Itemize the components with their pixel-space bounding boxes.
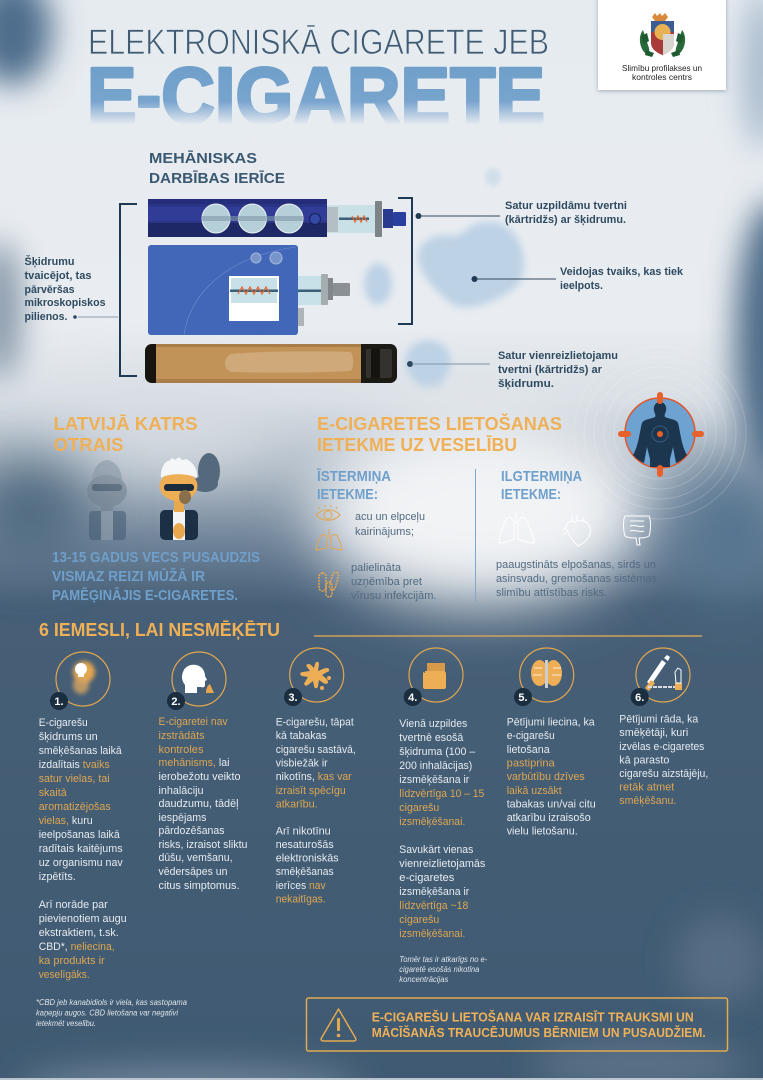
reason 5 [507,648,596,838]
callout: warning [306,998,728,1051]
text: teenagers statistic [52,549,260,604]
reason 4 [399,648,488,984]
reason 5: varbūtību dzīves [507,771,585,783]
panel: short-term impact: acu un elpceļu [355,511,425,523]
panel: short-term impact: uzņēmība pret [351,576,422,588]
reason 2: iespējams [158,812,207,824]
reason 4: izsmēķēšana ir [399,886,470,898]
reason 4: vienreizlietojamās [399,858,486,870]
panel: short-term impact: IETEKME: [317,486,378,503]
callout: warning: E-CIGAREŠU LIETOŠANA VAR IZRAISĪT TRAUKSMI UN [372,1010,694,1024]
heading: mechanical devices: MEHĀNISKAS [149,150,257,167]
device 3: disposable [145,344,397,383]
panel: long-term impact [496,468,657,599]
icon: splash: 3. [288,692,298,704]
reason 2: E-cigaretei nav [158,716,228,728]
icon: intestine [624,516,650,545]
callout: vapour [472,266,684,292]
callout: liquid vaporising: mikroskopiskos [24,297,106,309]
bracket: left [120,204,137,376]
reason 2: mehānisms, lai [158,757,230,769]
reason 3: ierīces nav [276,880,326,892]
reason 2: inhalāciju [158,785,204,797]
reason 4: tvertnē esošā [399,732,464,744]
callout: disposable tank: tvertni (kārtridžs) ar [498,364,603,376]
reason 2: citus simptomus. [158,880,240,892]
reason 5: tabakas un/vai citu [507,798,596,810]
reason 6: retāk atmet [619,782,674,794]
reason 1: CBD*, neliecina, [39,941,115,953]
reason 4: Tomēr tas ir atkarīgs no e- [399,955,488,964]
heading: 6 reasons: 6 IEMESLI, LAI NESMĒĶĒTU [39,620,280,640]
reason 6: smēķēšanu. [619,795,676,807]
reason 5: e-cigarešu [507,730,555,742]
reason 5: Pētījumi liecina, ka [507,716,596,728]
reason 4: cigarešu [399,914,439,926]
reason 5: pastiprina [507,758,556,770]
icon: viruses [319,572,339,597]
reason 1: E-cigarešu [39,717,88,729]
reason 4: Vienā uzpildes [399,718,468,730]
title: E-CIGARETE [87,50,545,140]
panel: long-term impact: paaugstināts elpošanas, sirds un [496,559,656,571]
icon: e-cigarette chained: 6. [635,692,644,704]
callout: refillable tank: Satur uzpildāmu tvertni [505,200,627,212]
reason 1: smēķēšanas laikā [39,745,123,757]
callout: refillable tank: (kārtridžs) ar šķidrumu. [505,214,626,226]
reason 3: kā tabakas [276,730,327,742]
icon: white lungs [499,512,534,543]
panel: long-term impact: asinsvadu, gremošanas sistēmas [496,573,657,585]
reason 1: uz organismu nav [39,857,123,869]
reason 3: nekaitīgas. [276,894,326,906]
reason 2: izstrādāts [158,730,205,742]
heading: every second in Latvia: OTRAIS [54,435,124,455]
reason 4: šķidruma (100 – [399,746,476,758]
text: teenagers statistic: 13-15 GADUS VECS PUSAUDZIS [52,549,260,566]
icon: smoking teenager [160,453,220,540]
heading: health impact [317,413,562,455]
heading: every second in Latvia [54,414,198,455]
reason 3: nesaturošās [276,839,334,851]
reason 4: e-cigaretes [399,872,455,884]
logo panel: kontroles centrs [632,72,692,82]
vapour clouds [364,168,524,388]
reason 2: ierobežotu veikto [158,771,240,783]
panel: short-term impact: kairinājums; [355,526,414,538]
reason 1: radītais kaitējums [39,843,123,855]
icon: e-cigarette chained [631,648,690,706]
title: ELEKTRONISKĀ CIGARETE JEB [88,23,549,62]
reason 5: vielu lietošanu. [507,826,578,838]
reason 2: kontroles [158,744,204,756]
reason 5: atkarību izraisošo [507,812,591,824]
footnote: CBD [36,998,188,1028]
panel: short-term impact: ĪSTERMIŅA [316,468,391,485]
icon: grey teenager [87,460,127,540]
icon: warning triangle [321,1009,356,1041]
reason 2: dūšu, vemšanu, [158,852,232,864]
icon: cigarette pack [404,648,463,706]
callout: liquid vaporising: pilienos. [24,311,68,323]
icon: brain: 5. [518,692,528,704]
reason 2: pārdozēšanas [158,825,225,837]
callout: refillable tank [416,200,627,226]
icon: cigarette pack: 4. [408,692,417,704]
callout: vapour: Veidojas tvaiks, kas tiek [560,266,684,278]
footnote: CBD: kaņepju augos. CBD lietošana var negatīvi [36,1008,178,1018]
heading: every second in Latvia: LATVIJĀ KATRS [54,414,198,434]
reason 4: cigaretē esošās nikotīna [399,965,480,974]
reason 3 [276,648,356,906]
reason 6: kā parasto [619,754,669,766]
callout: vapour: ieelpots. [560,280,603,292]
reason 6: Pētījumi rāda, ka [619,714,699,726]
footnote: CBD: ietekmēt veselību. [36,1019,96,1028]
reason 4: līdzvērtīga ~18 [399,900,468,912]
reason 3: nikotīns, kas var [276,771,352,783]
heading: mechanical devices: DARBĪBAS IERĪCE [149,170,285,187]
reason 4: izsmēķēšanai. [399,928,465,940]
icon: brain [514,648,574,706]
callout: disposable tank: Satur vienreizlietojamu [498,350,618,362]
callout: liquid vaporising: Šķidrumu [24,255,74,268]
heading: health impact: IETEKME UZ VESELĪBU [317,435,517,455]
reason 5: laikā uzsākt [507,785,562,797]
reason 1: izpētīts. [39,871,76,883]
callout: liquid vaporising: tvaicējot, tas [24,270,92,282]
callout: disposable tank [407,350,618,390]
reason 3: Arī nikotīnu [276,826,331,838]
icon: heart [563,515,590,546]
heading: health impact: E-CIGARETES LIETOŠANAS [317,413,562,434]
reason 1: vielas, kuru [39,815,93,827]
reason 1: šķidrums un [39,731,98,743]
icon: orange lungs [316,529,342,550]
icon: coat of arms [640,13,685,57]
reason 6 [619,648,708,807]
reason 1: ieelpošanas laikā [39,829,121,841]
device 2: box mod [148,245,350,335]
reason 4: līdzvērtīga 10 – 15 [399,788,484,800]
callout: warning: MĀCĪŠANĀS TRAUCĒJUMUS BĒRNIEM UN PUSAUDŽIEM. [372,1025,706,1040]
text: teenagers statistic: PAMĒĢINĀJIS E-CIGARETES. [52,587,238,604]
logo panel [598,0,726,90]
reason 1 [39,652,127,981]
reason 3: elektroniskās [276,852,339,864]
device 1: refillable pen [148,199,406,237]
icon: skull smoke: 1. [54,696,64,708]
icon: splash [284,648,344,706]
icon: head exhaling: 2. [171,696,181,708]
callout: liquid vaporising [24,255,118,323]
panel: short-term impact [316,468,436,602]
reason 6: smēķētāji, kuri [619,727,688,739]
reason 2: risks, izraisot sliktu [158,839,248,851]
reason 4: Savukārt vienas [399,844,474,856]
reason 6: izvēlas e-cigaretes [619,741,705,753]
footnote: CBD: *CBD jeb kanabidiols ir viela, kas sastopama [36,998,188,1007]
reason 2: daudzumu, tādēļ [158,798,238,810]
icon: skull smoke [50,652,110,710]
reason 1: izdalītais tvaiks [39,759,110,771]
reason 4: koncentrācijas [399,975,448,984]
reason 1: ka produkts ir [39,955,105,967]
bracket: right [398,198,412,324]
reason 5: lietošana [507,744,551,756]
reason 3: cigarešu sastāvā, [276,744,356,756]
heading: mechanical devices [149,150,285,187]
reason 3: visbiežāk ir [276,758,328,770]
reason 1: veselīgāks. [39,969,90,981]
reason 4: 200 inhalācijas) [399,760,472,772]
reason 3: izraisīt spēcīgu [276,785,346,797]
reason 2: vēdersāpes un [158,866,228,878]
callout: liquid vaporising: pārvēršas [24,284,74,296]
reason 1: aromatizējošas [39,801,111,813]
reason 3: atkarību. [276,798,318,810]
panel: long-term impact: ILGTERMIŅA [501,468,582,485]
panel: long-term impact: slimību attīstības risks. [496,587,607,599]
reason 3: smēķēšanas [276,866,334,878]
reason 1: skaitā [39,787,68,799]
icon: head exhaling [167,652,226,710]
panel: short-term impact: palielināta [351,562,402,574]
reason 3: E-cigarešu, tāpat [276,716,354,728]
icon: eye [316,505,340,520]
reason 1: pievienotiem augu [39,913,127,925]
reason 4: izsmēķēšanai. [399,816,465,828]
icon: body target [574,347,746,519]
text: teenagers statistic: VISMAZ REIZI MŪŽĀ IR [52,567,205,585]
reason 1: Arī norāde par [39,899,108,911]
reason 2 [158,652,248,892]
reason 6: cigarešu aizstājēju, [619,768,708,780]
reason 1: satur vielas, tai [39,773,110,785]
panel: short-term impact: vīrusu infekcijām. [351,590,436,602]
reason 4: cigarešu [399,802,439,814]
panel: long-term impact: IETEKME: [501,486,561,503]
logo panel: Slimību profilakses un [622,63,702,73]
reason 1: ekstraktiem, t.sk. [39,927,119,939]
callout: disposable tank: šķidrumu. [498,378,554,390]
reason 4: izsmēķēšana ir [399,774,470,786]
